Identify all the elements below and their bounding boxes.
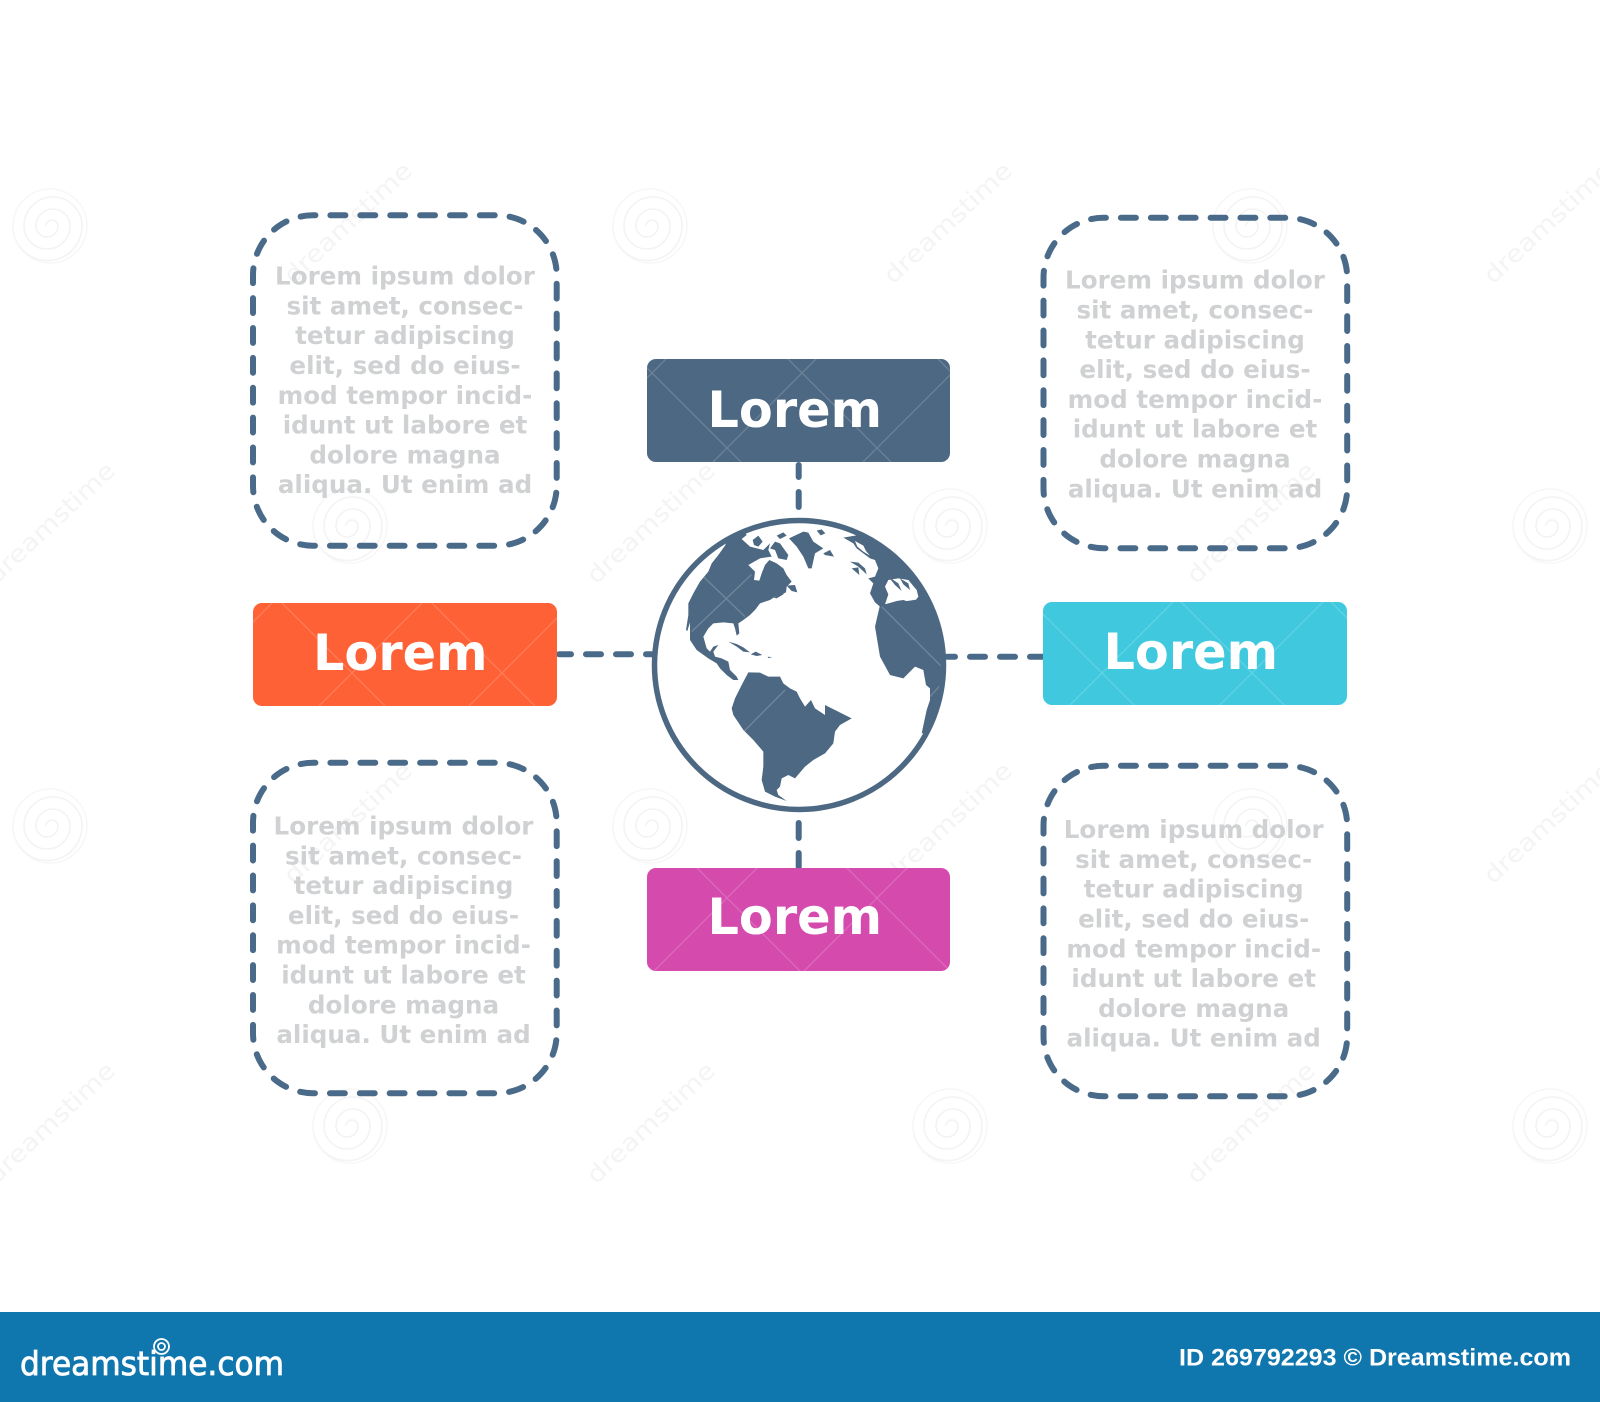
body text: top-right: mod tempor incid- — [1068, 385, 1322, 414]
body text: bottom-right: aliqua. Ut enim ad — [1067, 1024, 1321, 1053]
icon: logo spiral — [154, 1339, 169, 1354]
label: left box: Lorem — [313, 624, 488, 682]
watermark pattern: dreamstime — [278, 156, 418, 289]
body text: bottom-left: tetur adipiscing — [294, 871, 513, 900]
body text: bottom-left: aliqua. Ut enim ad — [276, 1020, 531, 1049]
body text: top-right: tetur adipiscing — [1085, 325, 1305, 354]
label: right box: Lorem — [1104, 623, 1278, 681]
label: right box — [1043, 602, 1347, 705]
body text: bottom-right: dolore magna — [1098, 994, 1289, 1023]
panel: top-right text box — [1044, 218, 1347, 548]
body text: bottom-right: sit amet, consec- — [1075, 845, 1312, 874]
watermark pattern: dreamstime — [1181, 456, 1321, 589]
body text: top-right: Lorem ipsum dolor — [1065, 266, 1326, 295]
logo: dreamstime.com: dreamstime.com — [20, 1344, 284, 1383]
connector: bottom — [796, 823, 802, 867]
label: top box: Lorem — [708, 381, 882, 439]
africa — [875, 600, 941, 734]
watermark pattern: dreamstime — [581, 456, 721, 589]
body text: top-right: idunt ut labore et — [1073, 415, 1318, 444]
watermark pattern: dreamstime — [278, 756, 418, 889]
body text: top-left: idunt ut labore et — [283, 411, 528, 440]
body text: bottom-left: dolore magna — [308, 990, 499, 1019]
europe — [823, 535, 924, 606]
body text: top-left: elit, sed do eius- — [289, 351, 521, 380]
north america and arctic — [686, 530, 797, 683]
body text: bottom-left: elit, sed do eius- — [288, 901, 519, 930]
body text: top-left: aliqua. Ut enim ad — [278, 470, 532, 499]
watermark pattern: dreamstime — [1181, 1056, 1321, 1189]
label: bottom box — [647, 868, 950, 971]
watermark pattern: dreamstime — [1478, 156, 1600, 289]
label: top box — [647, 359, 950, 462]
watermark pattern: dreamstime — [1478, 756, 1600, 889]
body text: bottom-right: elit, sed do eius- — [1078, 904, 1309, 933]
greenland — [789, 529, 825, 568]
body text: bottom-left: idunt ut labore et — [281, 960, 526, 990]
connector: left — [559, 651, 652, 657]
footer bar — [0, 1312, 1600, 1402]
body text: bottom-left: mod tempor incid- — [276, 931, 531, 960]
watermark pattern: dreamstime — [878, 156, 1018, 289]
panel: top-left text box — [253, 215, 557, 546]
body text: top-left: Lorem ipsum dolor — [275, 262, 536, 291]
body text: top-right: sit amet, consec- — [1076, 295, 1314, 324]
label: left box — [253, 603, 557, 706]
body text: top-left: dolore magna — [309, 440, 501, 469]
image id credit: ID 269792293 © Dreamstime.com — [1179, 1344, 1571, 1372]
body text: bottom-left: sit amet, consec- — [285, 841, 522, 870]
label: bottom box: Lorem — [708, 888, 882, 946]
watermark pattern: dreamstime — [878, 756, 1018, 889]
icon: globe — [654, 520, 960, 810]
body text: top-right: dolore magna — [1099, 444, 1291, 473]
connector: top — [796, 465, 802, 507]
body text: top-left: mod tempor incid- — [278, 381, 532, 410]
body text: top-left: sit amet, consec- — [286, 291, 524, 320]
south america and caribbean — [728, 642, 852, 801]
panel: bottom-left text box — [253, 763, 557, 1093]
watermark pattern: dreamstime — [581, 1056, 721, 1189]
panel: bottom-right text box — [1044, 766, 1347, 1096]
body text: bottom-right: tetur adipiscing — [1084, 875, 1304, 904]
body text: top-left: tetur adipiscing — [295, 321, 515, 350]
connector: right — [947, 654, 1043, 660]
body text: bottom-right: Lorem ipsum dolor — [1064, 815, 1325, 844]
body text: top-right: aliqua. Ut enim ad — [1068, 474, 1322, 503]
body text: bottom-right: idunt ut labore et — [1071, 964, 1316, 993]
body text: top-right: elit, sed do eius- — [1079, 355, 1311, 384]
body text: bottom-left: Lorem ipsum dolor — [274, 812, 534, 840]
body text: bottom-right: mod tempor incid- — [1066, 934, 1321, 963]
watermark pattern — [0, 156, 1600, 1189]
